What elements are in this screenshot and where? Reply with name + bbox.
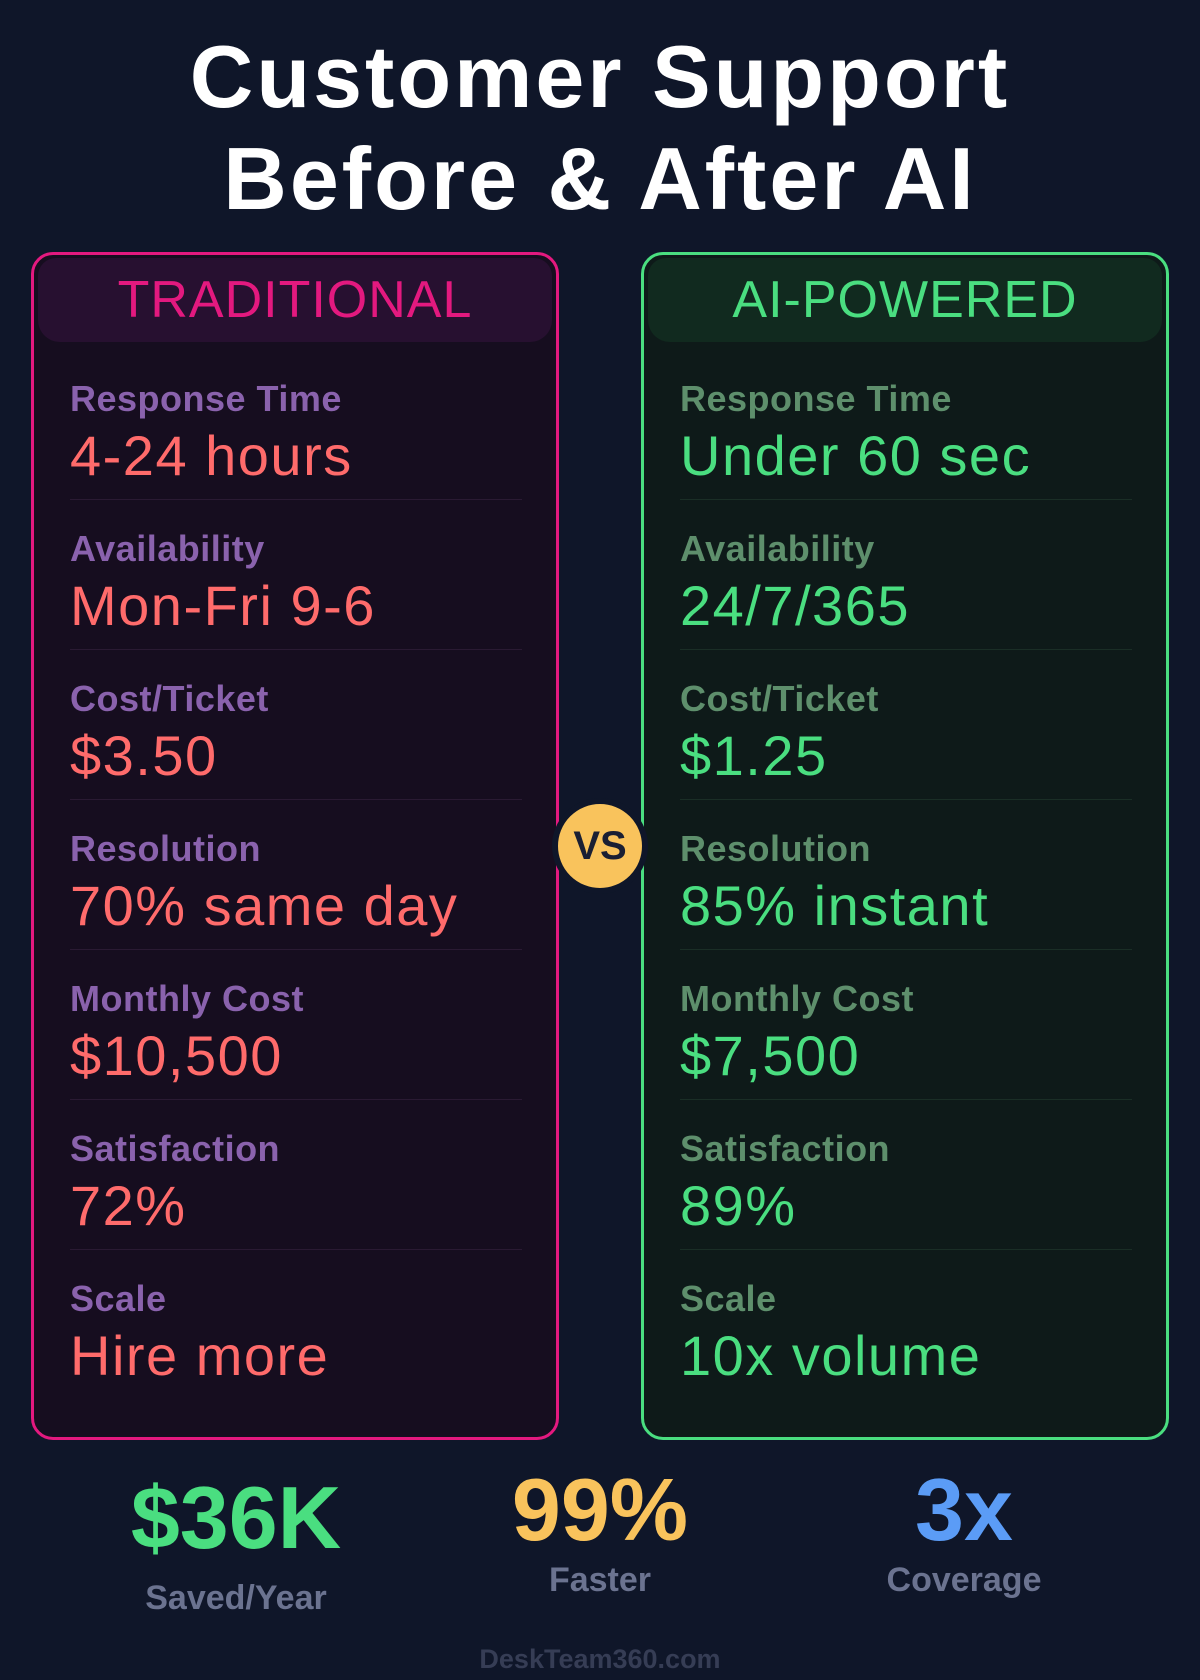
row: satisfaction: 72%: [70, 1174, 187, 1237]
row: scale: [680, 1278, 981, 1387]
stat: faster: 99%: [512, 1460, 688, 1559]
row: cost/ticket: [680, 678, 1132, 800]
stat: saved per year: Saved/Year: [145, 1579, 327, 1617]
row: monthly cost: Monthly Cost: [680, 978, 914, 1019]
header: ai-powered: [648, 258, 1162, 342]
row: resolution: 85% instant: [680, 874, 989, 937]
vs badge: [552, 798, 648, 894]
row: resolution: [70, 828, 522, 950]
row: resolution: 70% same day: [70, 874, 458, 937]
stat: coverage: 3x: [915, 1460, 1013, 1559]
row: cost/ticket: Cost/Ticket: [70, 678, 269, 719]
row: monthly cost: $10,500: [70, 1024, 283, 1087]
row: scale: Scale: [70, 1278, 167, 1319]
row: satisfaction: [70, 1128, 522, 1250]
row: response time: 4-24 hours: [70, 424, 353, 487]
row: resolution: Resolution: [680, 828, 871, 869]
row: monthly cost: Monthly Cost: [70, 978, 304, 1019]
row: availability: Availability: [70, 528, 265, 569]
row: cost/ticket: $3.50: [70, 724, 218, 787]
row: resolution: [680, 828, 1132, 950]
row: monthly cost: [70, 978, 522, 1100]
stat: faster: Faster: [549, 1561, 651, 1599]
row: scale: [70, 1278, 329, 1387]
row: response time: Under 60 sec: [680, 424, 1031, 487]
header: traditional: [38, 258, 552, 342]
row: monthly cost: $7,500: [680, 1024, 860, 1087]
row: satisfaction: Satisfaction: [680, 1128, 890, 1169]
row: scale: Hire more: [70, 1324, 329, 1387]
footer: DeskTeam360.com: [479, 1644, 721, 1674]
row: monthly cost: [680, 978, 1132, 1100]
stat: saved per year: [131, 1468, 341, 1617]
row: cost/ticket: [70, 678, 522, 800]
row: response time: Response Time: [680, 378, 952, 419]
row: satisfaction: [680, 1128, 1132, 1250]
title: Before & After AI: [223, 129, 977, 228]
row: availability: Mon-Fri 9-6: [70, 574, 376, 637]
row: satisfaction: 89%: [680, 1174, 797, 1237]
row: availability: [680, 528, 1132, 650]
row: response time: Response Time: [70, 378, 342, 419]
panel: traditional: [31, 252, 559, 1440]
title: Customer Support: [190, 27, 1010, 126]
row: availability: 24/7/365: [680, 574, 910, 637]
panel: ai-powered: [641, 252, 1169, 1440]
row: satisfaction: Satisfaction: [70, 1128, 280, 1169]
row: cost/ticket: $1.25: [680, 724, 828, 787]
header: ai-powered: AI-POWERED: [732, 271, 1078, 329]
row: availability: [70, 528, 522, 650]
row: resolution: Resolution: [70, 828, 261, 869]
title: [190, 27, 1010, 228]
row: cost/ticket: Cost/Ticket: [680, 678, 879, 719]
row: response time: [70, 378, 522, 500]
row: scale: Scale: [680, 1278, 777, 1319]
row: scale: 10x volume: [680, 1324, 981, 1387]
header: traditional: TRADITIONAL: [118, 271, 472, 329]
vs badge: VS: [573, 824, 627, 868]
row: response time: [680, 378, 1132, 500]
stat: saved per year: $36K: [131, 1468, 341, 1567]
stat: coverage: Coverage: [887, 1561, 1041, 1599]
row: availability: Availability: [680, 528, 875, 569]
stat: coverage: [887, 1460, 1041, 1599]
